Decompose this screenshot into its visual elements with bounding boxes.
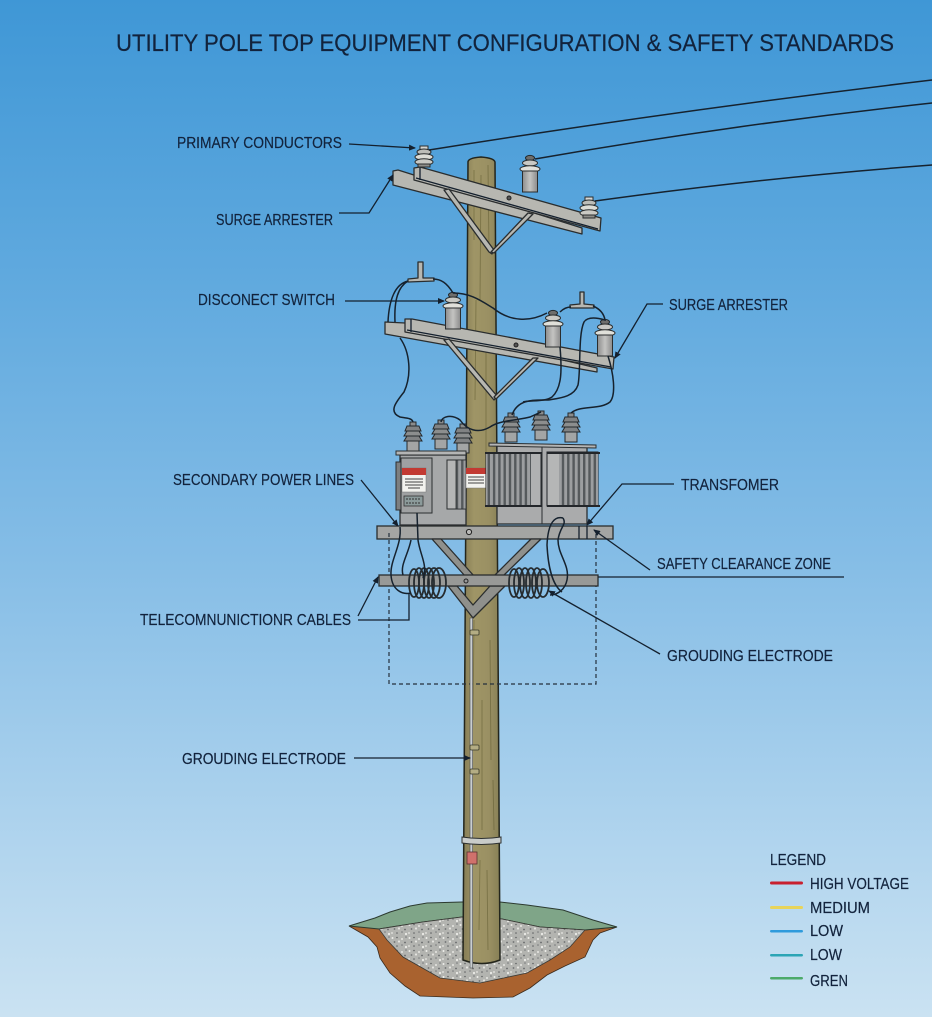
clips bbox=[470, 630, 479, 635]
braces bbox=[444, 189, 494, 254]
callout: transformer bbox=[587, 477, 779, 525]
legend heading: LEGEND bbox=[770, 852, 826, 869]
callout: telecommunication cables bbox=[140, 577, 409, 629]
callout: safety clearance zone bbox=[594, 530, 844, 577]
callout: safety clearance zone: SAFETY CLEARANCE ZONE bbox=[657, 556, 831, 573]
legend: low blue: LOW bbox=[810, 923, 843, 940]
callout: surge arrester right bbox=[615, 297, 788, 358]
front arm bbox=[405, 319, 614, 369]
switch left bbox=[408, 262, 434, 282]
tank bbox=[497, 446, 587, 524]
bushings bbox=[404, 422, 422, 451]
legend: high voltage: HIGH VOLTAGE bbox=[810, 876, 909, 893]
braces bbox=[444, 339, 497, 400]
legend: low teal: LOW bbox=[810, 947, 842, 964]
ground mound with gravel and soil bbox=[349, 902, 617, 998]
insulator middle bbox=[520, 155, 540, 192]
callout: telecommunication cables: TELECOMNUNICTIONR CABLES bbox=[140, 612, 351, 629]
wood pole bbox=[463, 157, 500, 964]
lid bbox=[396, 451, 466, 455]
callout: surge arrester top: SURGE ARRESTER bbox=[216, 212, 333, 229]
callout: surge arrester right: SURGE ARRESTER bbox=[669, 297, 788, 314]
soil bbox=[349, 926, 617, 998]
middle crossarm assembly bbox=[385, 319, 614, 400]
disconnect switches bbox=[408, 262, 594, 308]
middle insulators bbox=[443, 292, 615, 356]
upper insulators bbox=[415, 146, 598, 218]
data plate bbox=[404, 496, 423, 506]
lid bbox=[489, 443, 596, 448]
warning label bbox=[402, 468, 426, 492]
grass bbox=[349, 902, 617, 930]
legend: green: GREN bbox=[810, 973, 848, 990]
grounding wire and clips bbox=[462, 618, 501, 968]
bolt bbox=[507, 196, 511, 200]
pole band bbox=[462, 837, 501, 844]
switch right bbox=[570, 292, 594, 308]
wiring bbox=[388, 279, 614, 595]
right transformer bbox=[485, 411, 600, 524]
left coil bbox=[409, 568, 446, 598]
cooling fins bbox=[447, 460, 466, 509]
callout: primary conductors: PRIMARY CONDUCTORS bbox=[177, 135, 342, 152]
upper crossarm assembly bbox=[393, 167, 601, 254]
telecom cable coils bbox=[409, 568, 549, 598]
callout: secondary power lines bbox=[173, 472, 398, 526]
primary conductors bbox=[429, 80, 932, 201]
callout: grounding electrode right: GROUDING ELECTRODE bbox=[667, 648, 833, 665]
bolt bbox=[514, 343, 518, 347]
bushings bbox=[502, 413, 520, 442]
lower braces bbox=[432, 539, 541, 618]
left fin bank bbox=[485, 453, 542, 506]
callout: transformer: TRANSFOMER bbox=[681, 477, 779, 494]
insulator left bbox=[415, 146, 433, 167]
callout: grounding electrode lower: GROUDING ELECTRODE bbox=[182, 751, 346, 768]
rear arm bbox=[385, 322, 597, 372]
red tag bbox=[467, 852, 477, 864]
callout: surge arrester top bbox=[216, 175, 393, 229]
lower crossarm bbox=[379, 575, 598, 586]
callout: secondary power lines: SECONDARY POWER LINES bbox=[173, 472, 354, 489]
callout: disconnect switch: DISCONECT SWITCH bbox=[198, 292, 335, 309]
left transformer bbox=[396, 420, 472, 525]
rear arm bbox=[393, 170, 582, 234]
insulator right bbox=[580, 197, 598, 218]
right coil bbox=[509, 568, 549, 598]
gravel bbox=[379, 917, 585, 983]
legend bbox=[770, 852, 909, 990]
safety clearance zone dashed box bbox=[389, 531, 596, 684]
legend: medium: MEDIUM bbox=[810, 900, 870, 917]
warning sign on pole bbox=[466, 468, 486, 488]
callout: grounding electrode right bbox=[549, 591, 833, 665]
front arm bbox=[414, 167, 601, 231]
right fin bank bbox=[547, 452, 600, 506]
tank bbox=[400, 455, 466, 525]
platform crossarm bbox=[377, 526, 613, 539]
